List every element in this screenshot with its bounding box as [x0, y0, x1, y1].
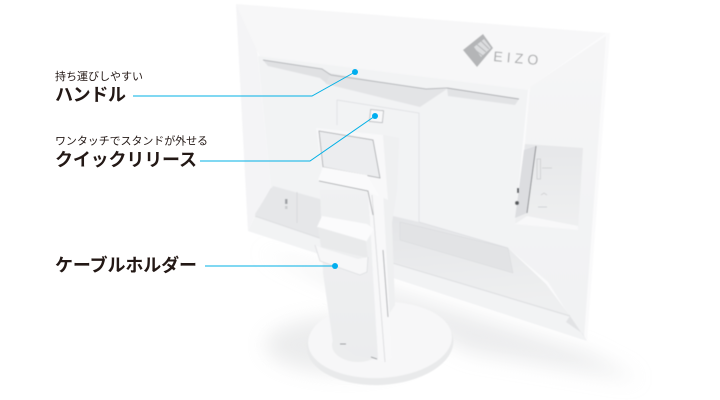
holder top [317, 216, 374, 242]
port recess [515, 144, 583, 230]
port floor [515, 216, 578, 230]
monitor body [236, 4, 610, 341]
centre panel [258, 56, 528, 248]
base rim [304, 299, 456, 389]
caption: ワンタッチでスタンドが外せる [55, 134, 208, 148]
callout: handle [55, 69, 358, 105]
floor shadow [258, 250, 640, 380]
base collar [332, 328, 384, 362]
logo mark [463, 34, 493, 67]
leader line [205, 265, 335, 267]
left port icons [285, 199, 288, 209]
holder face [318, 227, 368, 258]
top panel [236, 4, 606, 106]
upper stand plate [319, 131, 380, 178]
marker [352, 69, 358, 75]
right lower facet [566, 316, 587, 341]
port labels [537, 159, 552, 207]
caption: 持ち運びしやすい [55, 69, 143, 83]
left recess divider [296, 192, 298, 223]
port side wall [515, 146, 536, 218]
left connector recess [255, 186, 322, 242]
leader line [200, 116, 375, 161]
logo: EIZO [463, 34, 539, 68]
right side panel [508, 36, 606, 338]
cable holder [315, 216, 374, 275]
upper stand plate frame [316, 128, 388, 200]
heading: ケーブルホルダー [55, 254, 197, 276]
stand mount plate [337, 100, 419, 200]
quick release button [369, 109, 384, 123]
left side panel [236, 4, 271, 231]
monitor back [236, 4, 610, 341]
base top [306, 298, 454, 382]
column face [320, 190, 378, 360]
handle recess [322, 72, 447, 107]
lower recess [255, 188, 570, 316]
marker [372, 113, 378, 119]
heading: クイックリリース [55, 150, 197, 170]
base slots [340, 344, 377, 359]
marker [332, 263, 338, 269]
cable loop [315, 245, 368, 275]
lower inner panel [400, 222, 513, 273]
stand [316, 128, 399, 362]
callout: quick release [55, 113, 378, 170]
collar top [318, 167, 380, 197]
port connectors [515, 188, 519, 205]
callout: cable holder [55, 254, 338, 276]
leader line [133, 72, 355, 96]
base [304, 298, 456, 389]
logo word: EIZO [493, 48, 539, 68]
bottom band [248, 216, 587, 341]
handle slot left [263, 60, 330, 83]
heading: ハンドル [55, 85, 126, 105]
column rear strip [368, 190, 392, 362]
handle slot right [447, 88, 519, 105]
stand bracket side [376, 135, 399, 317]
